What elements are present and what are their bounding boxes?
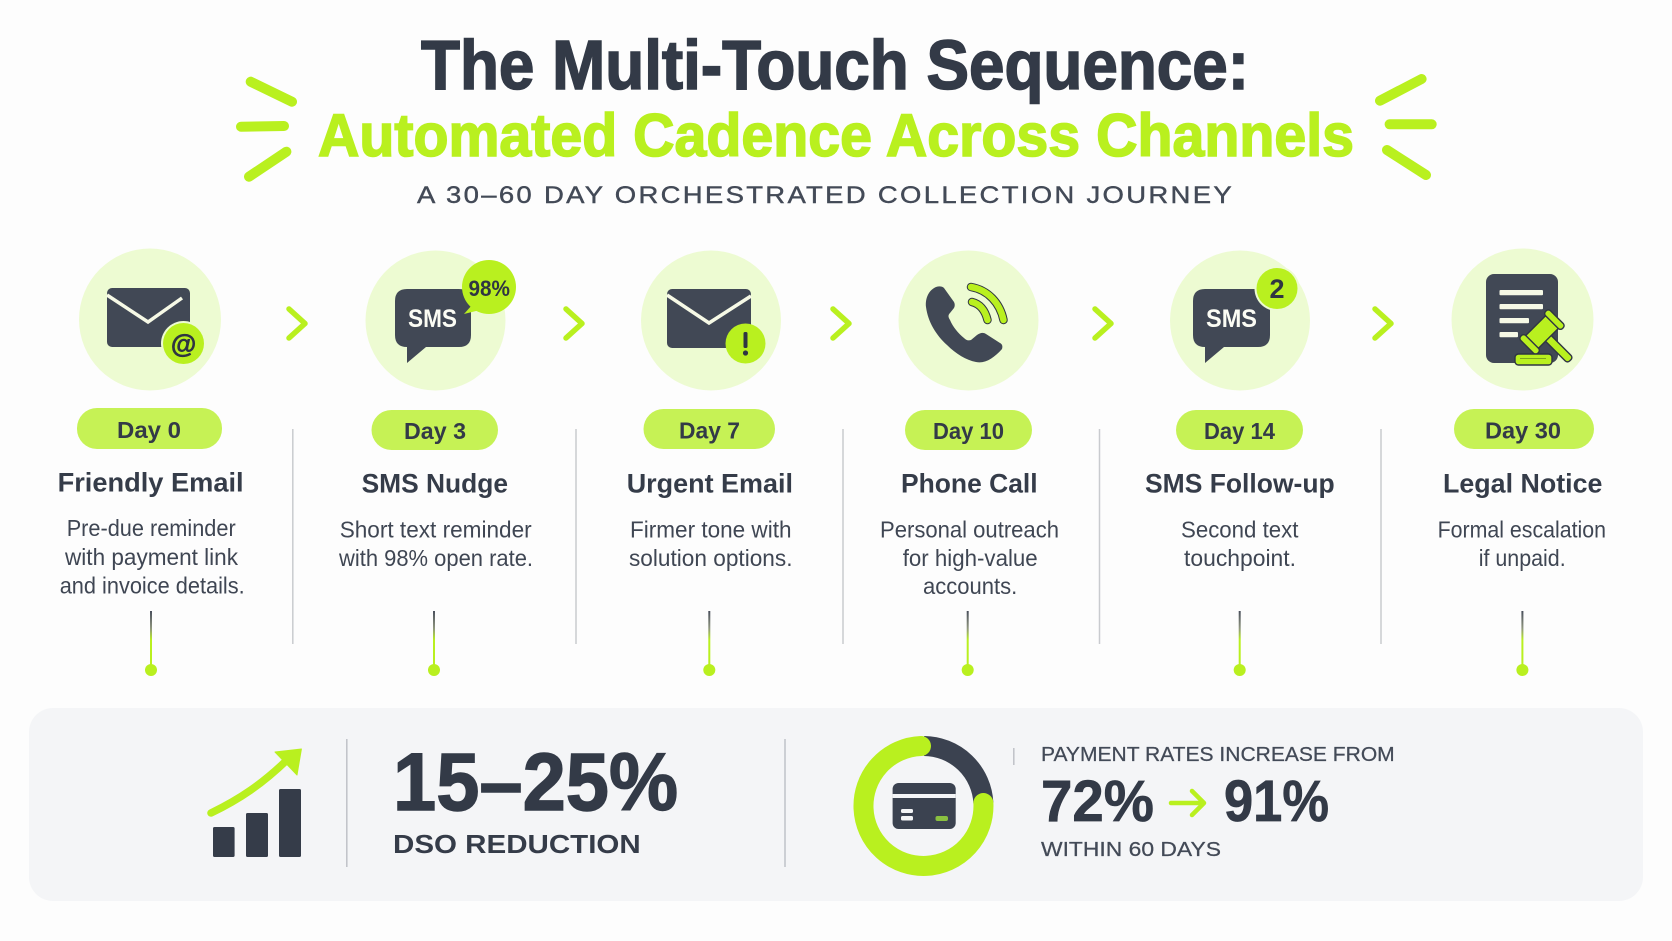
arrow: step 2 to 3 (566, 309, 582, 338)
stat: DSO reduction: 15–25% (393, 737, 678, 828)
day pill: Day 30 (1485, 418, 1561, 444)
divider (346, 739, 348, 867)
step heading: SMS Follow-up (1145, 468, 1335, 498)
icon: email with at badge: @ (171, 328, 196, 358)
arrow: step 3 to 4 (833, 309, 849, 338)
timeline stem (703, 611, 715, 676)
step description (338, 516, 533, 571)
stat: payment rates: 72% (1041, 769, 1154, 834)
step 3: urgent email (627, 250, 793, 676)
arrow: rate change (1171, 791, 1204, 815)
column dividers (293, 429, 1381, 644)
step description (60, 515, 245, 598)
timeline stem (145, 611, 157, 676)
day pill (1454, 409, 1594, 449)
decorative rays left (241, 82, 292, 177)
title line 2: Automated Cadence Across Channels (318, 102, 1354, 169)
timeline stem (962, 611, 974, 676)
icon: email with exclamation badge (641, 250, 781, 390)
step description: if unpaid. (1479, 545, 1566, 571)
day pill: Day 0 (117, 417, 181, 443)
day pill (372, 410, 498, 450)
day pill (1176, 410, 1303, 450)
step description: and invoice details. (60, 572, 245, 598)
arrow: step 4 to 5 (1095, 309, 1111, 338)
step description: accounts. (923, 573, 1017, 599)
icon: document with gavel (1452, 248, 1594, 390)
icon: sms with 98 percent badge: 98% (468, 276, 510, 301)
icon: sms with badge 2: 2 (1269, 274, 1285, 304)
step description (1181, 516, 1299, 571)
timeline stem (428, 611, 440, 676)
icon: rising bar chart (211, 749, 301, 857)
step 2: sms nudge (338, 250, 533, 676)
timeline stem (1234, 611, 1246, 676)
step description: touchpoint. (1184, 545, 1296, 571)
step description: Second text (1181, 516, 1299, 542)
step 4: phone call (880, 250, 1059, 676)
title (318, 26, 1354, 209)
step 5: sms follow-up (1145, 250, 1335, 676)
day pill (77, 408, 222, 449)
day pill: Day 10 (933, 418, 1004, 444)
stat: payment rates: PAYMENT RATES INCREASE FROM (1041, 743, 1395, 766)
step description (880, 516, 1059, 599)
step description: Firmer tone with (630, 516, 792, 542)
arrow: step 1 to 2 (289, 309, 305, 338)
day pill: Day 7 (679, 418, 740, 444)
step description: solution options. (629, 545, 792, 571)
step heading: SMS Nudge (362, 468, 508, 498)
timeline stem (1516, 611, 1528, 676)
step description: with 98% open rate. (338, 545, 533, 571)
stat: payment rates: 91% (1224, 769, 1329, 834)
step description: Short text reminder (340, 516, 532, 542)
title line 1: The Multi-Touch Sequence: (421, 26, 1249, 104)
decorative rays right (1380, 79, 1432, 175)
icon: sms with 98 percent badge: SMS (408, 305, 457, 333)
day pill: Day 3 (404, 418, 466, 444)
step description: Formal escalation (1438, 516, 1606, 542)
day pill (905, 410, 1032, 450)
stat: payment rates: WITHIN 60 DAYS (1041, 838, 1221, 861)
step 1: friendly email (58, 248, 245, 676)
icon: sms with 98 percent badge (366, 250, 516, 390)
step heading: Phone Call (901, 468, 1038, 498)
step description: with payment link (64, 544, 238, 570)
subtitle: A 30–60 DAY ORCHESTRATED COLLECTION JOURNEY (417, 182, 1234, 209)
divider (784, 739, 786, 867)
step description (1438, 516, 1606, 571)
step 6: legal notice (1438, 248, 1606, 676)
day pill (644, 409, 775, 449)
stat: payment rates (1041, 743, 1395, 861)
icon: phone with signal waves (898, 250, 1038, 390)
icon: email with at badge (79, 248, 221, 390)
panel: results (29, 708, 1643, 901)
donut chart with card icon (863, 746, 983, 866)
icon: sms with badge 2 (1170, 250, 1310, 390)
step description (629, 516, 792, 571)
step description: for high-value (903, 545, 1038, 571)
stat: DSO reduction: DSO REDUCTION (393, 829, 641, 859)
step heading: Friendly Email (58, 468, 244, 498)
step description: Pre-due reminder (67, 515, 236, 541)
step heading: Urgent Email (627, 468, 793, 498)
divider small (1013, 748, 1015, 765)
step description: Personal outreach (880, 516, 1059, 542)
icon: sms with badge 2: SMS (1206, 305, 1257, 333)
step heading: Legal Notice (1443, 468, 1602, 498)
day pill: Day 14 (1204, 418, 1275, 444)
arrow: step 5 to 6 (1375, 309, 1391, 338)
